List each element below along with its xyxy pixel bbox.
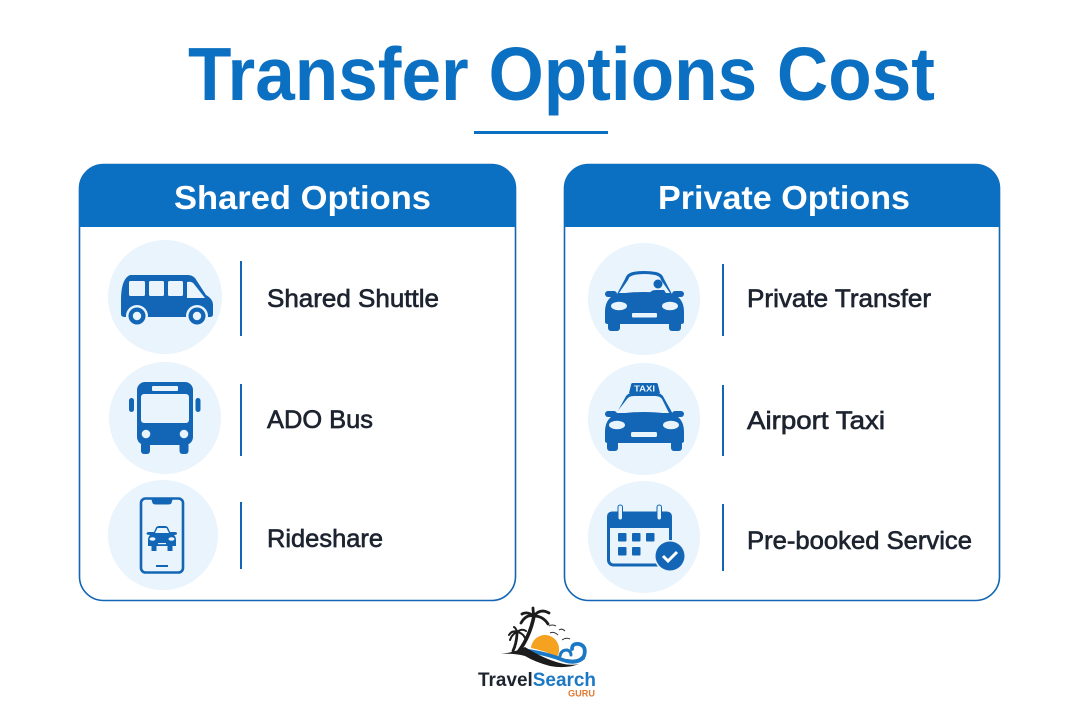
title: Transfer Options Cost [188,32,935,116]
icon: airport taxi [588,363,700,475]
label: rideshare: Rideshare [267,525,383,553]
logo island [501,647,579,667]
panel frame: private [564,164,1000,600]
divider: bus [240,384,242,456]
icon: ADO bus [109,362,221,474]
panel frame: shared [80,164,516,600]
panel: private options [564,164,1000,600]
panel header: shared [79,164,516,227]
divider: airport taxi [722,385,724,456]
divider: private transfer [722,264,724,336]
icon: shuttle van [108,240,222,354]
icon: rideshare phone [108,480,218,590]
logo palm trees [509,608,549,651]
label: pre-booked service: Pre-booked Service [747,527,972,555]
panel header: private: Private Options [658,179,910,216]
logo: TravelSearch Guru [478,608,596,700]
title underline [474,131,608,134]
logo tagline: GURU [568,688,595,700]
logo sun [531,635,559,657]
divider: rideshare [240,502,242,569]
icon: airport taxi: TAXI [634,384,655,394]
divider: pre-booked [722,504,724,571]
icon: private car with driver [588,243,700,355]
label: airport taxi: Airport Taxi [747,407,885,435]
divider: shuttle [240,261,242,336]
panel header: private [564,164,1000,227]
logo birds [549,625,570,640]
logo wave [529,644,585,662]
label: shared shuttle: Shared Shuttle [267,285,439,313]
label: private transfer: Private Transfer [747,285,931,313]
panel header: shared: Shared Options [174,179,431,216]
label: ADO bus: ADO Bus [267,406,373,434]
logo wordmark: TravelSearch [478,669,596,691]
icon: pre-booked calendar [588,481,700,593]
panel: shared options [79,164,516,600]
